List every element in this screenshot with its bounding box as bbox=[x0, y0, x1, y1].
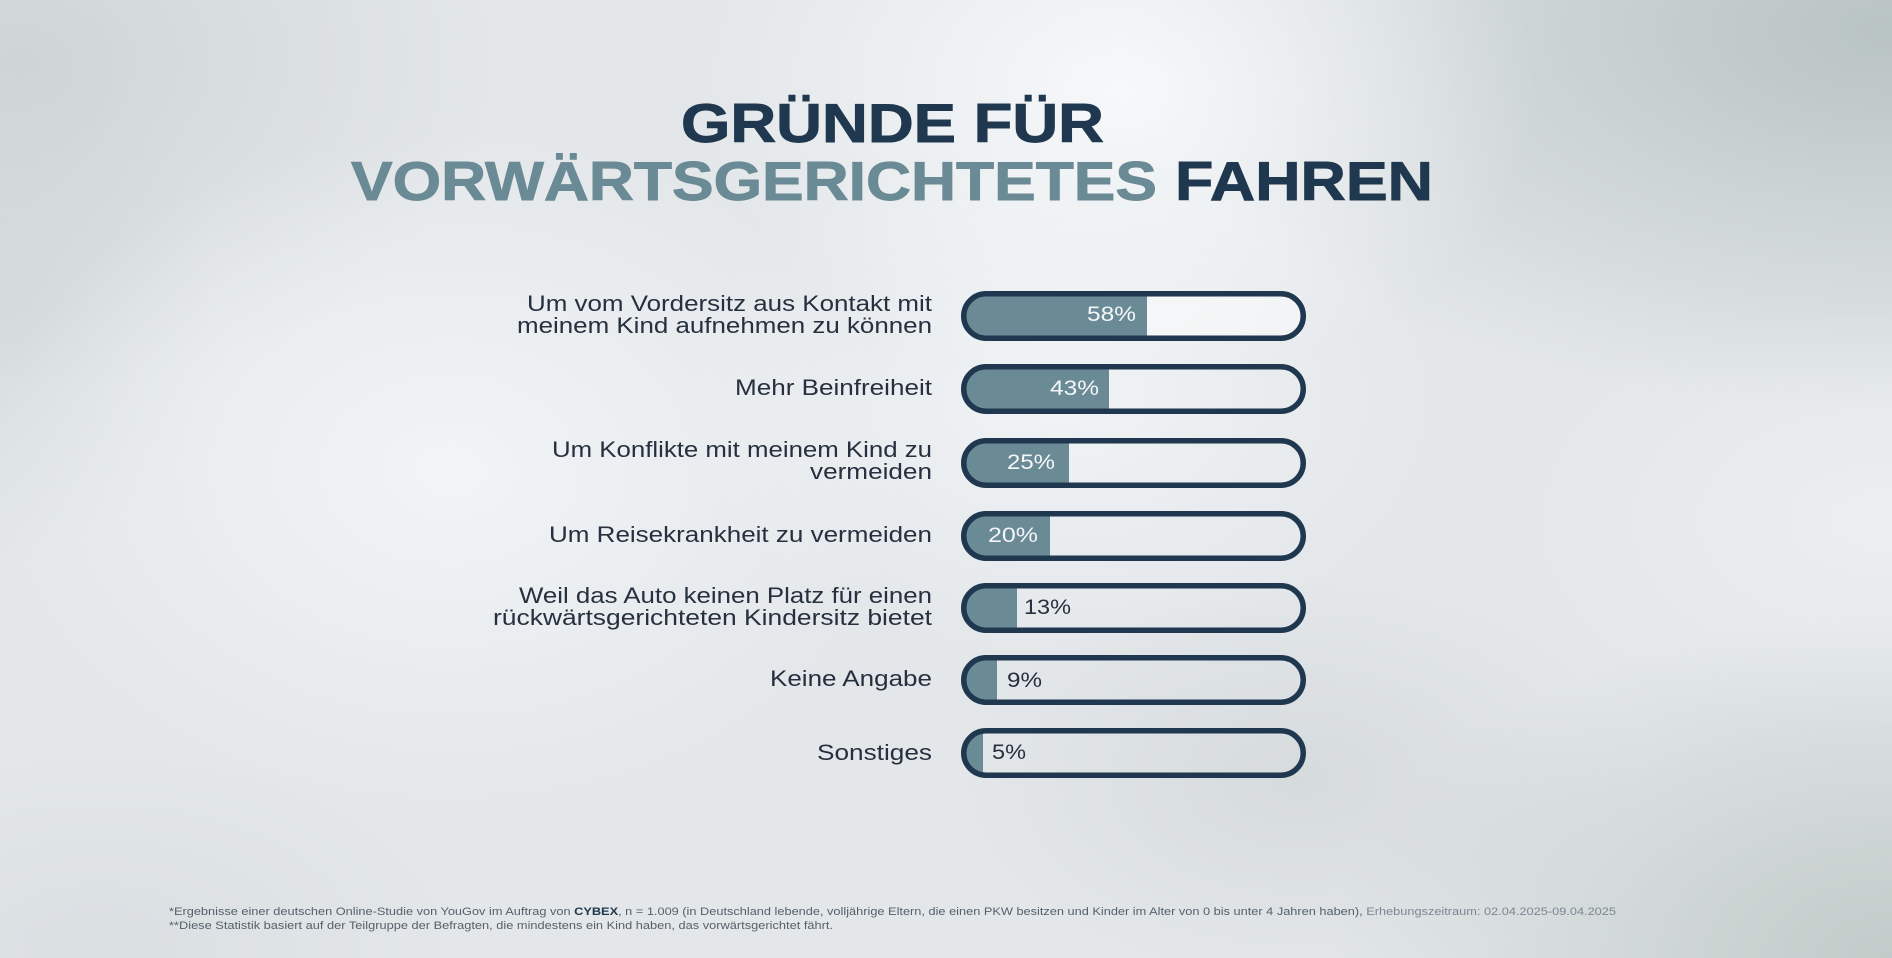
row: Beinfreiheit 43% bbox=[735, 364, 1303, 414]
title: GRÜNDE FÜR bbox=[681, 92, 1104, 154]
title bbox=[351, 92, 1433, 212]
row: Konflikte 25% bbox=[552, 437, 1303, 488]
row: Kontakt 58%: 58% bbox=[1087, 303, 1136, 326]
row: Kontakt 58%: meinem Kind aufnehmen zu können bbox=[517, 313, 932, 338]
row: Beinfreiheit 43%: Mehr Beinfreiheit bbox=[735, 375, 932, 400]
row: kein Platz 13%: Weil das Auto keinen Platz für einen bbox=[519, 583, 932, 608]
row: Reisekrankheit 20%: Um Reisekrankheit zu vermeiden bbox=[549, 522, 932, 547]
row: Reisekrankheit 20% bbox=[549, 511, 1303, 561]
row: Kontakt 58% bbox=[517, 291, 1303, 341]
footnotes: *Ergebnisse einer deutschen Online-Studie von YouGov im Auftrag von CYBEX , n = 1.009 (in Deutschland lebende, volljährige Eltern, die einen PKW besitzen und Kinder im Alter von 0 bis unter 4 Jahren haben), Erhebungszeitraum: 02.04.2025-09.04.2025 bbox=[169, 906, 1616, 918]
footnotes bbox=[169, 906, 1616, 932]
title: FAHREN bbox=[1175, 150, 1433, 212]
footnotes: **Diese Statistik basiert auf der Teilgruppe der Befragten, die mindestens ein Kind haben, das vorwärtsgerichtet fährt. bbox=[169, 920, 833, 932]
row: Konflikte 25%: vermeiden bbox=[810, 459, 932, 484]
row: Sonstiges 5% bbox=[817, 728, 1303, 778]
row: Konflikte 25%: 25% bbox=[1007, 451, 1055, 474]
row: Beinfreiheit 43%: 43% bbox=[1050, 377, 1099, 400]
row: kein Platz 13%: 13% bbox=[1024, 596, 1071, 619]
row: kein Platz 13% bbox=[493, 583, 1303, 633]
row: kein Platz 13%: rückwärtsgerichteten Kindersitz bietet bbox=[493, 605, 932, 630]
title: VORWÄRTSGERICHTETES bbox=[351, 150, 1157, 212]
row: Keine Angabe 9% bbox=[770, 655, 1303, 705]
row: Sonstiges 5%: 5% bbox=[992, 741, 1026, 764]
infographic canvas bbox=[169, 94, 1616, 932]
row: Konflikte 25%: Um Konflikte mit meinem Kind zu bbox=[552, 437, 932, 462]
row: Kontakt 58%: Um vom Vordersitz aus Kontakt mit bbox=[527, 291, 932, 316]
row: Keine Angabe 9%: 9% bbox=[1007, 669, 1042, 692]
row: Keine Angabe 9%: Keine Angabe bbox=[770, 666, 932, 691]
row: Sonstiges 5%: Sonstiges bbox=[817, 740, 932, 765]
row: Reisekrankheit 20%: 20% bbox=[988, 524, 1038, 547]
